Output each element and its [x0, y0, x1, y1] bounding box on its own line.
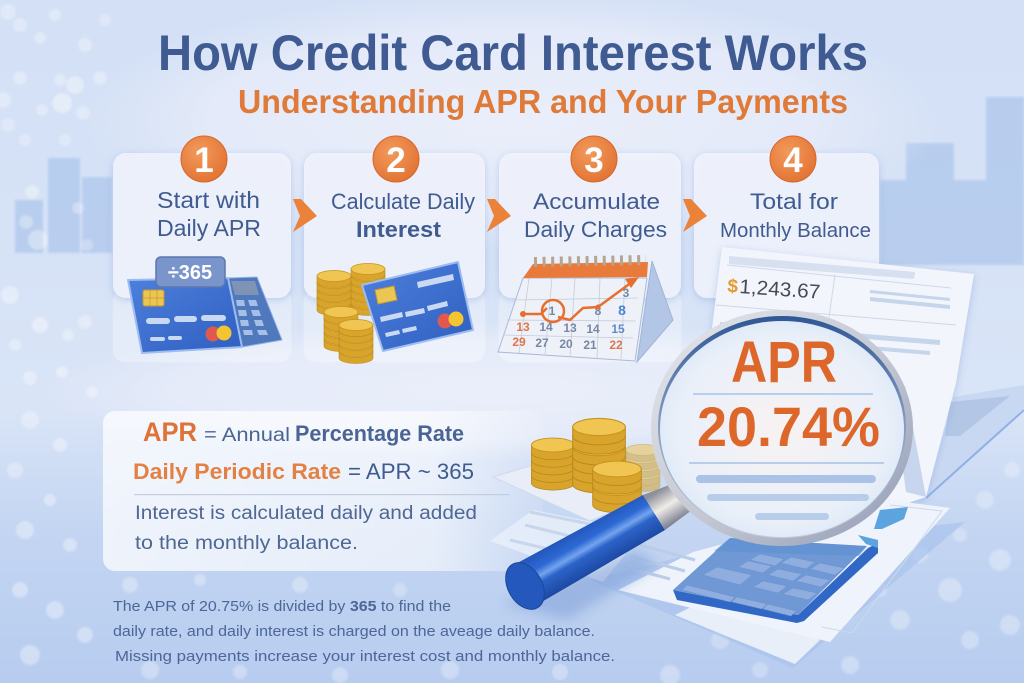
paper: lower sheets — [490, 500, 965, 668]
footnote text: Missing payments increase your interest cost and monthly balance. — [115, 649, 615, 665]
APR definition line: Percentage Rate — [295, 421, 464, 446]
paper: right sheet — [926, 385, 1024, 498]
step 1 label: Daily APR — [157, 215, 261, 241]
panel: APR definition — [103, 411, 543, 571]
statement document — [703, 247, 974, 517]
icon: credit card — [128, 278, 242, 353]
step 1 label: Start with — [157, 187, 260, 213]
icon: calendar: 20 — [559, 337, 573, 351]
step 4 label: Total for — [750, 189, 838, 214]
icon: calendar: 21 — [583, 338, 597, 352]
step 4 label: Monthly Balance — [720, 220, 871, 242]
icon: calendar: 22 — [609, 338, 623, 352]
icon: calendar: 15 — [611, 322, 625, 336]
step 3 label: Daily Charges — [524, 217, 667, 242]
title: How Credit Card Interest Works — [158, 25, 868, 81]
lens — [651, 310, 913, 546]
icon: coin stacks near lens — [531, 418, 660, 513]
badge 1 — [181, 136, 227, 182]
statement document: 1,243.67 — [739, 276, 821, 304]
explanation text: to the monthly balance. — [135, 533, 358, 554]
badge 4: 4 — [783, 141, 803, 180]
step 2 label: Calculate Daily — [331, 189, 475, 214]
footnote text: daily rate, and daily interest is charged on the aveage daily balance. — [113, 624, 595, 640]
arrow: step 2 to 3 — [487, 199, 511, 232]
icon: calendar: 13 — [516, 320, 530, 334]
APR definition line: = Annual — [204, 425, 290, 446]
icon: calendar — [498, 260, 673, 362]
icon: coins — [317, 264, 385, 352]
statement amount: $ — [727, 276, 739, 298]
icon: calendar: 13 — [563, 321, 577, 335]
panel: step 3 — [498, 136, 681, 362]
tag: divide by 365: ÷365 — [168, 262, 212, 284]
APR definition line: APR — [143, 417, 197, 447]
icon: calendar: 14 — [539, 320, 553, 334]
badge 1: 1 — [194, 141, 214, 180]
step 2 label: Interest — [356, 217, 442, 242]
explanation text: Interest is calculated daily and added — [135, 503, 477, 524]
subtitle: Understanding APR and Your Payments — [238, 83, 848, 120]
icon: calendar: 29 — [512, 335, 526, 349]
tag: divide by 365 — [156, 257, 225, 287]
panel: step 2 — [304, 136, 485, 364]
shadow of handle — [503, 550, 657, 620]
icon: calculator — [228, 277, 282, 347]
step 3 label: Accumulate — [533, 189, 660, 214]
arrow: step 1 to 2 — [293, 199, 317, 232]
arrow: step 3 to 4 — [683, 199, 707, 232]
lens text: rate: 20.74% — [697, 395, 880, 458]
icon: front coins — [339, 320, 373, 364]
icon: calendar: 27 — [535, 336, 549, 350]
icon: calendar: 14 — [586, 322, 600, 336]
lens text: APR: APR — [731, 330, 837, 395]
paper: coins sheet — [493, 459, 643, 521]
badge 2: 2 — [386, 141, 406, 180]
magnifying glass — [498, 310, 913, 620]
daily rate line: = APR ~ 365 — [348, 459, 474, 484]
daily rate line: Daily Periodic Rate — [133, 459, 341, 484]
icon: bottom calculator — [673, 507, 908, 623]
icon: calendar: 8 — [595, 304, 602, 318]
icon: calendar: 1 — [549, 304, 556, 318]
icon: calendar: 3 — [623, 286, 630, 300]
icon: calendar: 8 — [618, 302, 626, 318]
footnote text: The APR of 20.75% is divided by 365 to find the — [113, 599, 444, 615]
badge 3: 3 — [584, 141, 604, 180]
panel: step 4 — [694, 136, 879, 298]
handle — [498, 482, 692, 616]
divider — [134, 494, 510, 495]
icon: credit card — [362, 262, 473, 351]
badge 3 — [571, 136, 617, 182]
badge 2 — [373, 136, 419, 182]
panel: step 1 — [113, 136, 291, 362]
badge 4 — [770, 136, 816, 182]
